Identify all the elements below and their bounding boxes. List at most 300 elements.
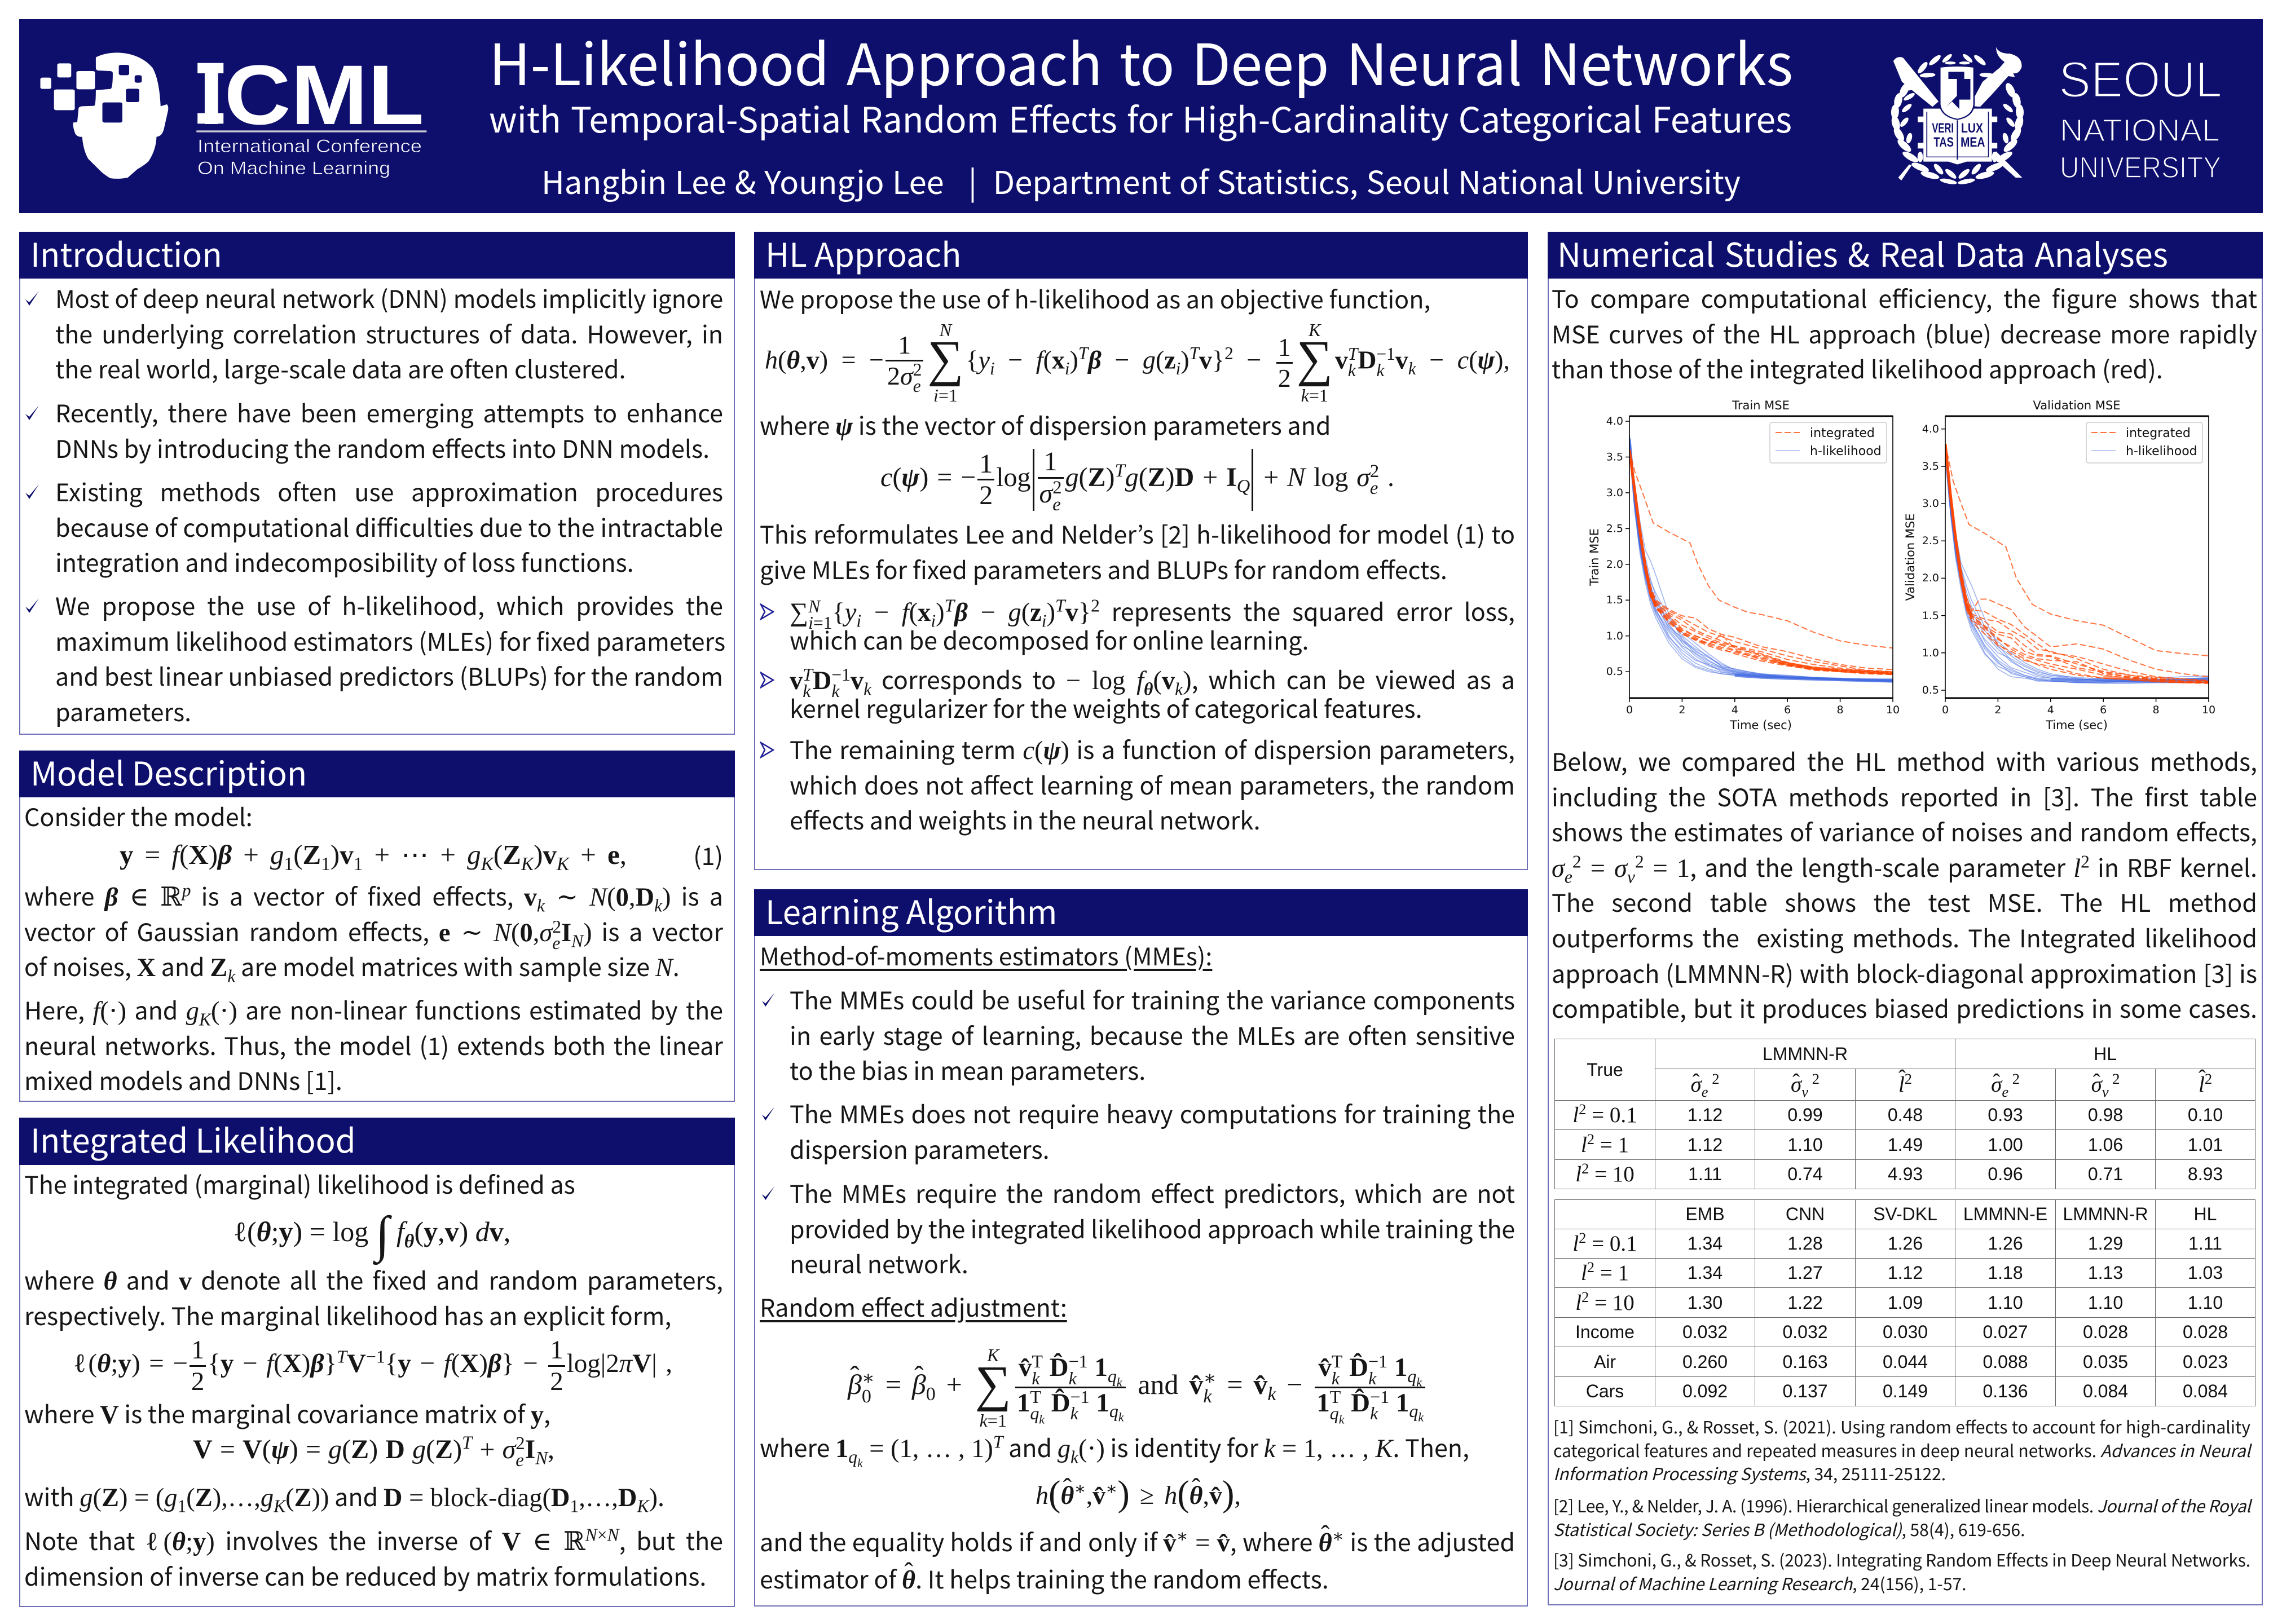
text: consider the model: Consider the model: xyxy=(24,798,253,833)
plot: Train MSE: 1.5 xyxy=(1606,594,1623,606)
equation: inequality: h( ∗,v̂∗) ≥ h( ,v̂), xyxy=(1036,1473,1241,1513)
table: test MSE comparison: 0.032 xyxy=(1782,1322,1828,1342)
table: variance component estimates: 0.71 xyxy=(2088,1164,2123,1184)
table: test MSE comparison: 1.11 xyxy=(2188,1233,2222,1254)
table: test MSE comparison: 1.13 xyxy=(2088,1263,2123,1283)
table: test MSE comparison: 0.084 xyxy=(2183,1381,2228,1401)
equation: adjusted estimators: k=1 xyxy=(980,1410,1007,1431)
table: test MSE comparison: 0.136 xyxy=(1983,1381,2028,1401)
subheading: method-of-moments estimators: Method-of-moments estimators (MMEs): xyxy=(760,938,1212,973)
table: test MSE comparison: 1.29 xyxy=(2088,1233,2123,1254)
equation: h-likelihood: e xyxy=(913,376,921,396)
text: method comparison: compatible, but it produces biased predictions in some cases. xyxy=(1552,990,2257,1025)
equation: adjusted estimators: v̂ D̂ 1qk xyxy=(1318,1353,1422,1389)
equation: c(psi): 2 xyxy=(1370,461,1379,482)
panel: Learning Algorithm xyxy=(754,889,1528,1607)
plot: Validation MSE: 4 xyxy=(2047,704,2054,716)
bullet: random effects in DNN: Recently, there have been emerging attempts to enhance xyxy=(55,395,723,430)
heading: Learning Algorithm xyxy=(754,889,1528,936)
subheading: random effect adjustment: Random effect adjustment: xyxy=(760,1289,1067,1324)
equation: h-likelihood: 2 xyxy=(913,360,922,379)
text: inverse note: Note that ℓ(θ;y) involves the inverse of V ∈ ℝN×N, but the xyxy=(24,1522,723,1557)
heading: Learning Algorithm: Learning Algorithm xyxy=(765,886,1057,934)
panel: Introduction xyxy=(19,232,735,735)
table: test MSE comparison: 0.149 xyxy=(1883,1381,1928,1401)
bullet: remaining term: effects and weights in the neural network. xyxy=(790,802,1261,837)
text: model definitions: of noises, X and Zk are model matrices with sample size N. xyxy=(24,948,680,986)
heading: Model Description xyxy=(19,751,735,797)
equation: h-likelihood: 2 xyxy=(1278,363,1291,392)
table: variance component estimates: 0.10 xyxy=(2188,1105,2223,1125)
bullet: approximation procedures xyxy=(24,474,723,580)
bullet: DNN models ignore correlation xyxy=(25,280,723,386)
table: variance component estimates: σ xyxy=(1791,1073,1801,1097)
table: test MSE comparison: 1.30 xyxy=(1688,1292,1722,1313)
reference 3: Journal of Machine Learning Research, 24(156), 1-57. xyxy=(1553,1570,1966,1595)
heading: Integrated Likelihood: Integrated Likelihood xyxy=(30,1115,356,1162)
heading: Introduction: Introduction xyxy=(30,229,222,276)
plot: Validation MSE: 1.0 xyxy=(1922,647,1939,659)
text: dispersion parameters: where ψ is the vector of dispersion parameters and xyxy=(760,407,1331,442)
plot: Train MSE: 2.5 xyxy=(1606,522,1623,535)
equation: h-likelihood: k xyxy=(1377,360,1384,380)
table: test MSE comparison: l2 = 1 xyxy=(1581,1259,1629,1285)
equation: c(psi) xyxy=(880,447,1394,509)
equation: h-likelihood: k=1 xyxy=(1301,385,1328,405)
text: method comparison: including the SOTA methods reported in [3]. The first table xyxy=(1552,779,2257,814)
icon: Seoul National University logo: UNIVERSITY xyxy=(2060,151,2221,184)
bullet: approximation procedures: Existing methods often use approximation procedures xyxy=(55,474,723,509)
icon: Seoul National University logo: SEOUL xyxy=(2059,52,2222,108)
bullet: kernel regularizer xyxy=(760,665,1515,722)
table: variance component estimates: v 2 xyxy=(1801,1070,1820,1100)
equation: adjusted estimators: = 0 + and v̂ = v̂k − xyxy=(886,1369,1302,1405)
subtitle: with Temporal-Spatial Random Effects for High-Cardinality Categorical Features xyxy=(489,92,1792,143)
table: test MSE comparison: 1.28 xyxy=(1787,1233,1823,1254)
plot: Validation MSE: Validation MSE xyxy=(2033,399,2121,412)
panel: Model Description xyxy=(19,751,735,1102)
equation: adjusted estimators: ∗ xyxy=(1203,1368,1216,1389)
equation: adjusted estimators: T xyxy=(1332,1352,1342,1371)
equation: integrated likelihood: ℓ(θ;y) = log ∫ fθ(y,v) dv, xyxy=(234,1207,510,1263)
heading: HL Approach: HL Approach xyxy=(765,229,961,276)
reference 2: Statistical Society: Series B (Methodological), 58(4), 619-656. xyxy=(1553,1516,2025,1541)
table: variance component estimates: LMMNN-R xyxy=(1763,1043,1848,1063)
text: reformulation: give MLEs for fixed parameters and BLUPs for random effects. xyxy=(760,551,1447,586)
reference 1 xyxy=(1553,1415,2250,1485)
plot: Train MSE: 0.5 xyxy=(1606,665,1623,678)
text: non-linear functions: neural networks. Thus, the model (1) extends both the linear xyxy=(24,1027,723,1062)
equation: adjusted estimators: 1 D̂ 1qk xyxy=(1017,1388,1124,1424)
reference 3: [3] Simchoni, G., & Rosset, S. (2023). Integrating Random Effects in Deep Neural Networks. xyxy=(1553,1547,2250,1572)
bullet: MME random effect predictors: provided by the integrated likelihood approach while training the xyxy=(790,1211,1515,1246)
legend: Validation MSE xyxy=(2086,422,2202,463)
text: objective function intro: We propose the use of h-likelihood as an objective function, xyxy=(760,281,1430,316)
plot: Validation MSE: 4.0 xyxy=(1922,423,1939,435)
reference 1: Information Processing Systems, 34, 25111-25122. xyxy=(1553,1460,1946,1485)
text: reformulation: This reformulates Lee and Nelder’s [2] h-likelihood for model (1) to xyxy=(760,516,1515,551)
table: variance component estimates: True xyxy=(1587,1059,1623,1079)
table: variance component estimates: 1.12 xyxy=(1688,1135,1722,1155)
equation: h-likelihood: K xyxy=(1309,320,1320,340)
equation: h-likelihood xyxy=(765,320,1510,399)
table: test MSE comparison: SV-DKL xyxy=(1873,1204,1937,1224)
text: equality condition: θ xyxy=(1319,1529,1332,1557)
legend: Validation MSE: h-likelihood xyxy=(2126,444,2197,458)
text: covariance matrix: where V is the marginal covariance matrix of y, xyxy=(24,1396,550,1431)
plot: Train MSE: 10 xyxy=(1886,704,1900,716)
equation: marginal likelihood explicit form xyxy=(73,1330,672,1397)
equation: h-likelihood: k xyxy=(1348,360,1356,380)
text: non-linear functions: mixed models and DNNs [1]. xyxy=(24,1062,342,1097)
bullet: remaining term xyxy=(760,731,1515,837)
text: computational efficiency xyxy=(1552,280,2257,386)
bullet: DNN models ignore correlation: Most of deep neural network (DNN) models implicitly ignore xyxy=(55,280,723,315)
table: test MSE comparison: 0.032 xyxy=(1682,1322,1728,1342)
reference 1: categorical features and repeated measures in deep neural networks. Advances in Neural xyxy=(1553,1437,2250,1462)
text: parameters: respectively. The marginal likelihood has an explicit form, xyxy=(24,1298,671,1332)
icon: Seoul National University logo: NATIONAL xyxy=(2060,112,2220,148)
panel: Numerical Studies and Real Data Analyses xyxy=(1548,232,2263,1605)
bullet: remaining term: which does not affect learning of mean parameters, the random xyxy=(790,767,1515,802)
plot: Train MSE: 8 xyxy=(1837,704,1844,716)
plot: Validation MSE: 2.0 xyxy=(1922,572,1939,584)
text: method comparison: outperforms the existing methods. The Integrated likelihood xyxy=(1552,920,2257,955)
table: test MSE comparison: 0.088 xyxy=(1983,1351,2028,1371)
text: method comparison: The second table shows the test MSE. The HL method xyxy=(1552,884,2257,919)
equation: adjusted estimators: T xyxy=(1330,1387,1341,1407)
bullet: proposal of h-likelihood: maximum likelihood estimators (MLEs) for fixed parameters xyxy=(55,623,725,658)
table: test MSE comparison: 0.030 xyxy=(1883,1322,1928,1342)
text: equality condition xyxy=(760,1522,1515,1597)
table: test MSE comparison: 0.084 xyxy=(2083,1381,2128,1401)
equation: h-likelihood: h(θ,v) = − {yi − f(xi)Tβ − g(zi)Tv}2 − v D vk − c(ψ), xyxy=(765,343,1510,378)
equation: c(psi): e xyxy=(1052,495,1061,515)
equation: adjusted estimators: T xyxy=(1030,1387,1041,1407)
text: inverse note xyxy=(24,1522,723,1593)
plot: Train MSE: 3.5 xyxy=(1606,451,1623,464)
text: model definitions: e xyxy=(552,933,560,953)
table: variance component estimates: 0.48 xyxy=(1888,1105,1923,1125)
equation: adjusted estimators: β xyxy=(848,1369,862,1400)
bullet: kernel regularizer: kernel regularizer for the weights of categorical features. xyxy=(790,690,1422,725)
icon: Seoul National University logo: VERI xyxy=(1932,120,1954,135)
table: variance component estimates: HL xyxy=(2094,1043,2117,1063)
icon: ICML logo: On Machine Learning xyxy=(197,158,390,178)
bullet: squared error loss: N xyxy=(808,597,820,616)
table: variance component estimates: σ xyxy=(1991,1073,2002,1097)
text: method comparison: Below, we compared the HL method with various methods, xyxy=(1552,743,2257,778)
legend: Train MSE: h-likelihood xyxy=(1810,444,1882,458)
table: variance component estimates: 1.49 xyxy=(1888,1135,1923,1155)
plot: Train MSE: 2 xyxy=(1679,704,1685,716)
equation: c(psi): 1 xyxy=(1044,447,1058,476)
plot: Validation MSE: 0.5 xyxy=(1922,684,1939,696)
plot: Validation MSE: 2.5 xyxy=(1922,535,1939,547)
plot: Validation MSE: 2 xyxy=(1994,704,2001,716)
bullet: proposal of h-likelihood: parameters. xyxy=(55,694,191,729)
text: method comparison: approach (LMMNN-R) with block-diagonal approximation [3] is xyxy=(1552,955,2257,990)
table: test MSE comparison: 0.035 xyxy=(2083,1351,2128,1371)
table: test MSE comparison: l2 = 0.1 xyxy=(1572,1229,1637,1256)
equation: h-likelihood: N xyxy=(940,320,951,340)
text: non-linear functions xyxy=(24,992,723,1098)
text: computational efficiency: than those of the integrated likelihood approach (red). xyxy=(1552,351,2163,386)
bullet: MME computations: The MMEs does not require heavy computations for training the xyxy=(790,1096,1515,1131)
bullet: random effects in DNN: DNNs by introducing the random effects into DNN models. xyxy=(55,430,710,465)
text: integrated likelihood definition: The integrated (marginal) likelihood is defined as xyxy=(24,1166,575,1201)
equation: adjusted estimators: k xyxy=(1368,1369,1376,1388)
equation: inequality: θ xyxy=(1060,1481,1074,1510)
table: test MSE comparison: 0.027 xyxy=(1983,1322,2028,1342)
plot: Validation MSE: 6 xyxy=(2100,704,2107,716)
equation: h-likelihood: 2σ xyxy=(887,361,913,390)
reference 2: [2] Lee, Y., & Nelder, J. A. (1996). Hierarchical generalized linear models. Journal of the Royal xyxy=(1553,1493,2250,1517)
equation: adjusted estimators: k xyxy=(1332,1369,1340,1388)
table: test MSE comparison: 0.028 xyxy=(2183,1322,2228,1342)
table: variance component estimates: l2 = 0.1 xyxy=(1572,1101,1637,1127)
reference 2 xyxy=(1553,1494,2250,1541)
icon: Seoul National University logo: LUX xyxy=(1961,120,1983,135)
bullet: MME random effect predictors: neural network. xyxy=(790,1246,968,1281)
equation: adjusted estimators: β xyxy=(912,1369,926,1400)
bullet: MME random effect predictors xyxy=(760,1175,1515,1281)
bullet: proposal of h-likelihood xyxy=(24,588,723,729)
equation: marginal likelihood explicit form: 2 xyxy=(191,1367,204,1396)
bullet: squared error loss: which can be decomposed for online learning. xyxy=(790,622,1309,657)
plot: Train MSE: Time (sec) xyxy=(1729,718,1792,732)
table: test MSE comparison: 1.10 xyxy=(2088,1292,2123,1313)
equation: c(psi): e xyxy=(1370,478,1378,498)
table: variance component estimates: l xyxy=(2199,1073,2205,1097)
bullet: DNN models ignore correlation: the underlying correlation structures of data. However, in xyxy=(55,316,723,351)
bullet: proposal of h-likelihood: We propose the use of h-likelihood, which provides the xyxy=(55,588,723,623)
table: variance component estimates: 0.93 xyxy=(1988,1105,2023,1125)
equation: c(psi): c(ψ) = − log g(Z)Tg(Z)D + IQ + N log σ . xyxy=(880,461,1394,497)
table: test MSE comparison: CNN xyxy=(1786,1204,1825,1224)
bullet: proposal of h-likelihood: and best linear unbiased predictors (BLUPs) for the random xyxy=(55,658,723,693)
text: reformulation xyxy=(760,516,1515,586)
legend: Validation MSE: integrated xyxy=(2126,426,2191,440)
plot: Train MSE xyxy=(1588,399,1900,732)
table: variance component estimates: 1.06 xyxy=(2088,1135,2123,1155)
plot: Validation MSE: 8 xyxy=(2153,704,2160,716)
table: test MSE comparison: Air xyxy=(1594,1351,1616,1371)
heading: Introduction xyxy=(19,232,735,279)
text: computational efficiency: To compare computational efficiency, the figure shows that xyxy=(1552,280,2257,315)
equation: h-likelihood: T xyxy=(1348,344,1358,364)
text: computational efficiency: MSE curves of the HL approach (blue) decrease more rapidly xyxy=(1552,316,2257,351)
table: test MSE comparison xyxy=(1554,1199,2255,1406)
bullet: MME computations: dispersion parameters. xyxy=(790,1131,1050,1166)
bullet: kernel regularizer: T xyxy=(803,665,813,685)
table: test MSE comparison: 1.18 xyxy=(1988,1263,2023,1283)
equation: adjusted estimators: −1 xyxy=(1070,1387,1090,1407)
table: test MSE comparison: 0.028 xyxy=(2083,1322,2128,1342)
table: test MSE comparison: 1.26 xyxy=(1888,1233,1923,1254)
bullet: MME random effect predictors: The MMEs require the random effect predictors, which are not xyxy=(790,1175,1515,1210)
table: variance component estimates: e 2 xyxy=(2002,1070,2020,1100)
table: variance component estimates: 8.93 xyxy=(2188,1164,2223,1184)
table: test MSE comparison: 1.10 xyxy=(2188,1292,2223,1313)
table: test MSE comparison: HL xyxy=(2194,1204,2217,1224)
bullet: approximation procedures: because of computational difficulties due to the intractable xyxy=(55,509,723,544)
table: test MSE comparison: Income xyxy=(1575,1322,1635,1342)
icon: Seoul National University logo xyxy=(1891,47,2222,184)
equation: h-likelihood: ∑ xyxy=(1297,331,1333,387)
table: variance component estimates: e 2 xyxy=(1702,1070,1719,1100)
panel: Integrated Likelihood xyxy=(19,1118,735,1607)
text: method comparison xyxy=(1552,743,2257,1026)
bullet: MME usefulness: to the bias in mean parameters. xyxy=(790,1052,1146,1087)
bullet: approximation procedures: integration and indecomposibility of loss functions. xyxy=(55,544,634,579)
equation: adjusted estimators: K xyxy=(987,1345,999,1365)
text: method comparison: σe2 = σv2 = 1, and the length-scale parameter l2 in RBF kernel. xyxy=(1552,849,2257,886)
table: variance component estimates: 1.10 xyxy=(1787,1135,1823,1155)
equation: h-likelihood: i=1 xyxy=(933,385,958,405)
table: test MSE comparison: 1.27 xyxy=(1787,1263,1823,1283)
bullet: remaining term: The remaining term c(ψ) is a function of dispersion parameters, xyxy=(790,731,1515,766)
text: model definitions: 2 xyxy=(552,917,561,937)
text: non-linear functions: Here, f(⋅) and gK(⋅) are non-linear functions estimated by the xyxy=(24,992,723,1029)
text: parameters xyxy=(24,1262,723,1332)
table: test MSE comparison: LMMNN-R xyxy=(2063,1204,2148,1224)
equation: adjusted estimators: −1 xyxy=(1370,1387,1389,1407)
plot: Validation MSE xyxy=(1904,399,2215,732)
chart: Train and Validation MSE curves xyxy=(1588,399,2215,732)
text: model definitions: vector of Gaussian random effects, e ∼ N(0,σ IN) is a vector xyxy=(24,914,723,951)
plot: Train MSE: 1.0 xyxy=(1606,630,1623,642)
reference 1: [1] Simchoni, G., & Rosset, S. (2021). Using random effects to account for high-cardinality xyxy=(1553,1414,2250,1438)
plot: Train MSE: Train MSE xyxy=(1732,399,1790,412)
table: variance component estimates: 0.74 xyxy=(1787,1164,1823,1184)
bullet: MME usefulness: The MMEs could be useful for training the variance components xyxy=(790,982,1515,1017)
table: test MSE comparison: EMB xyxy=(1685,1204,1725,1224)
table: test MSE comparison: 1.10 xyxy=(1988,1292,2023,1313)
plot: Train MSE: 2.0 xyxy=(1606,558,1623,571)
equation: adjusted estimators: qk xyxy=(1330,1404,1344,1427)
table: test MSE comparison: 1.26 xyxy=(1988,1233,2023,1254)
table: variance component estimates: 1.00 xyxy=(1988,1135,2023,1155)
equation: adjusted estimators: −1 xyxy=(1368,1352,1387,1371)
equation: c(psi): 2 xyxy=(979,480,993,510)
reference 3 xyxy=(1553,1548,2250,1595)
heading: HL Approach xyxy=(754,232,1528,279)
table: test MSE comparison: l2 = 10 xyxy=(1575,1288,1635,1315)
table: variance component estimates: 4.93 xyxy=(1888,1164,1923,1184)
table: variance component estimates: 1.12 xyxy=(1688,1105,1722,1125)
equation: c(psi): 1 xyxy=(979,449,993,479)
equation: h-likelihood: −1 xyxy=(1377,344,1395,364)
equation number: (1) xyxy=(693,837,723,872)
equation: adjusted estimators: k xyxy=(1069,1369,1077,1388)
plot: Validation MSE: Time (sec) xyxy=(2045,718,2108,732)
table: variance component estimates xyxy=(1554,1039,2255,1189)
plot: Train MSE: 0 xyxy=(1626,704,1633,716)
equation: adjusted estimators: 0 xyxy=(862,1386,871,1407)
plot: Validation MSE: 3.5 xyxy=(1922,460,1939,473)
icon: ICML logo: ICML xyxy=(199,47,424,142)
table: test MSE comparison: 0.044 xyxy=(1883,1351,1928,1371)
plot: Validation MSE: 3.0 xyxy=(1922,497,1939,510)
bullet: kernel regularizer: k xyxy=(831,681,839,701)
plot: Validation MSE: 10 xyxy=(2202,704,2215,716)
equation: c(psi): σ xyxy=(1039,479,1052,509)
equation: adjusted estimators: k xyxy=(1032,1369,1040,1388)
equation: adjusted estimators: 1 D̂ 1qk xyxy=(1316,1388,1424,1424)
equation: adjusted estimators: ∑ xyxy=(975,1356,1011,1412)
panel: HL Approach xyxy=(754,232,1528,870)
equation: adjusted estimators: k xyxy=(1070,1404,1078,1423)
plot: Train MSE: Train MSE xyxy=(1588,528,1601,586)
table: test MSE comparison: 0.260 xyxy=(1682,1351,1728,1371)
icon: Seoul National University logo: MEA xyxy=(1961,134,1985,149)
equation: adjusted estimators: T xyxy=(1032,1352,1043,1371)
text: inverse note: dimension of inverse can be reduced by matrix formulations. xyxy=(24,1558,706,1593)
plot: Validation MSE: Validation MSE xyxy=(1904,513,1917,601)
table: test MSE comparison: 1.12 xyxy=(1888,1263,1923,1283)
bullet: MME computations xyxy=(760,1096,1515,1166)
table: variance component estimates: σ xyxy=(2091,1073,2102,1097)
table: test MSE comparison: 1.03 xyxy=(2188,1263,2223,1283)
icon: ICML logo: International Conference xyxy=(197,136,422,156)
equation: adjusted estimators xyxy=(848,1339,1427,1429)
plot: Train MSE: 6 xyxy=(1784,704,1791,716)
table: variance component estimates: 0.96 xyxy=(1988,1164,2023,1184)
text: equality condition: and the equality holds if and only if v̂∗ = v̂, where ∗ is the adjusted xyxy=(760,1524,1515,1559)
plot: Train MSE: 4.0 xyxy=(1606,415,1623,427)
bullet: kernel regularizer: −1 xyxy=(831,665,851,685)
equation: marginal likelihood explicit form: ℓ(θ;y) = − {y − f(X)β}TV−1{y − f(X)β} − log|2πV| , xyxy=(73,1347,672,1378)
text: g and D definitions: with g(Z) = (g1(Z),…,gK(Z)) and D = block-diag(D1,…,DK). xyxy=(24,1479,664,1516)
legend: Train MSE: integrated xyxy=(1810,426,1875,440)
equation: marginal likelihood explicit form: 1 xyxy=(550,1335,563,1365)
legend: Train MSE xyxy=(1770,422,1887,463)
table: test MSE comparison: 1.09 xyxy=(1888,1292,1923,1313)
equation: c(psi): 2 xyxy=(1052,478,1062,498)
equation: marginal likelihood explicit form: 1 xyxy=(191,1335,204,1365)
header banner xyxy=(19,19,2263,213)
equation: V covariance: 2 xyxy=(516,1433,525,1454)
heading: Model Description: Model Description xyxy=(30,748,307,795)
table: variance component estimates: l2 = 1 xyxy=(1581,1130,1629,1157)
table: test MSE comparison: 0.092 xyxy=(1682,1381,1728,1401)
text: parameters: where θ and v denote all the fixed and random parameters, xyxy=(24,1262,723,1297)
bullet: squared error loss xyxy=(760,597,1515,654)
table: variance component estimates: v 2 xyxy=(2102,1070,2120,1100)
table: variance component estimates: l xyxy=(1898,1073,1905,1097)
icon: Seoul National University logo: TAS xyxy=(1933,134,1954,149)
equation: adjusted estimators: qk xyxy=(1030,1404,1045,1427)
table: test MSE comparison: 1.34 xyxy=(1688,1233,1722,1254)
equation: marginal likelihood explicit form: 2 xyxy=(550,1367,563,1396)
table: variance component estimates: 0.99 xyxy=(1787,1105,1823,1125)
table: test MSE comparison: 1.22 xyxy=(1787,1292,1823,1313)
plot: Train MSE: 3.0 xyxy=(1606,487,1623,499)
text: model definitions: where β ∈ ℝp is a vector of fixed effects, vk ∼ N(0,Dk) is a xyxy=(24,878,723,915)
heading: Numerical Studies & Real Data Analyses: Numerical Studies & Real Data Analyses xyxy=(1557,229,2168,276)
plot: Validation MSE: 1.5 xyxy=(1922,610,1939,622)
bullet: random effects in DNN xyxy=(24,395,723,465)
equation: model (1): y = f(X)β + g1(Z1)v1 + ⋯ + gK(ZK)vK + e, xyxy=(120,839,627,875)
table: test MSE comparison: LMMNN-E xyxy=(1963,1204,2047,1224)
title: H-Likelihood Approach to Deep Neural Networks xyxy=(489,20,1793,102)
authors and affiliation: Hangbin Lee & Youngjo Lee | Department of Statistics, Seoul National University xyxy=(541,158,1741,204)
text: method comparison: shows the estimates of variance of noises and random effects, xyxy=(1552,814,2257,849)
bullet: DNN models ignore correlation: the real world, large-scale data are often clustered. xyxy=(55,351,625,386)
heading: Integrated Likelihood xyxy=(19,1118,735,1165)
table: variance component estimates: l2 = 10 xyxy=(1575,1160,1635,1186)
